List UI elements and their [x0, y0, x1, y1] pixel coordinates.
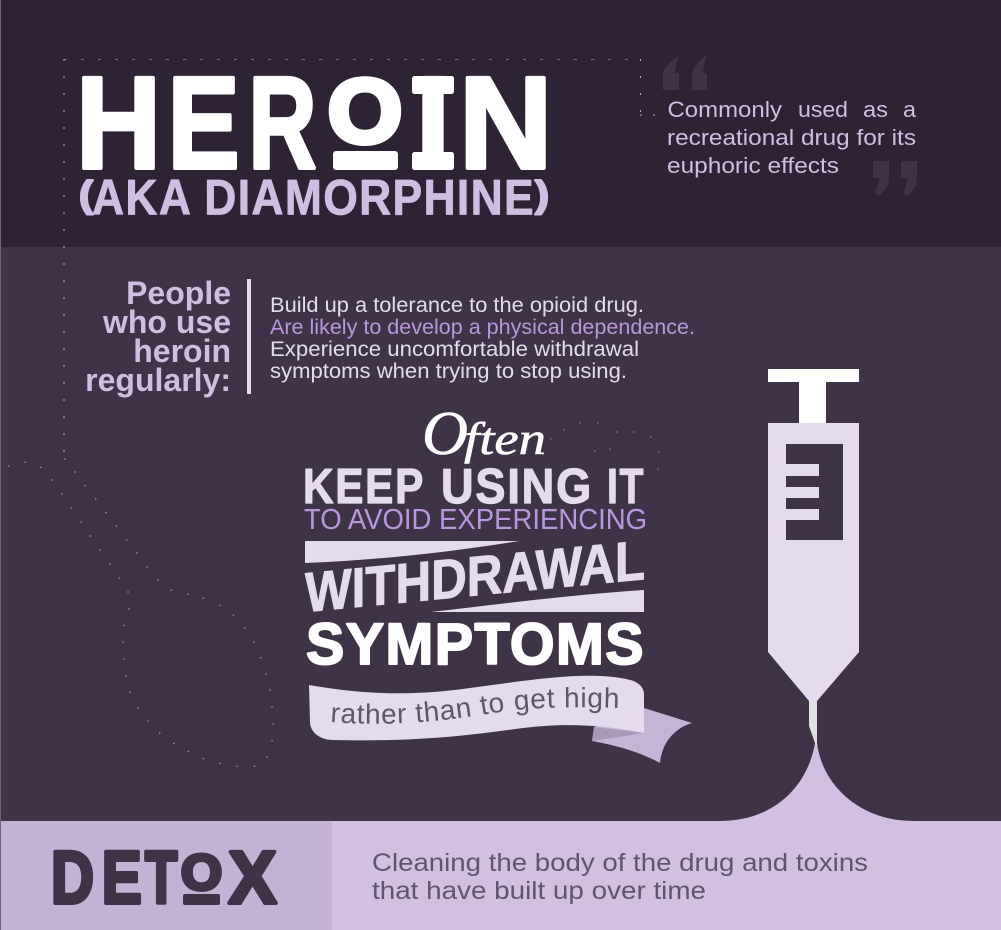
lettering: Often: ften — [464, 413, 546, 464]
barrel window with measure ticks — [786, 444, 843, 540]
lettering: keep using it: IT — [607, 460, 645, 514]
lettering: Often: O — [422, 400, 468, 468]
title: DETOX: D — [51, 836, 94, 919]
lettering: symptoms: SYMPTOMS — [306, 612, 645, 677]
title: DETOX: E — [102, 836, 142, 919]
heading: people who use heroin regularly: People — [126, 275, 231, 311]
text block: effects of regular use — [270, 294, 695, 383]
lettering: keep using it — [303, 460, 645, 514]
title: HEROIN: E — [168, 49, 240, 196]
ribbon banner: rather than to get high — [332, 687, 618, 724]
quote text: used — [798, 97, 848, 122]
barrel — [768, 423, 859, 701]
subtitle: ( — [79, 174, 94, 215]
quote text: Commonly — [668, 97, 782, 122]
heading: people who use heroin regularly: who use — [102, 304, 231, 340]
plunger — [768, 369, 859, 423]
subtitle: ) — [535, 174, 549, 215]
syringe base flare — [720, 743, 913, 821]
text block: detox definition: that have built up over time — [372, 877, 706, 905]
heading: people who use heroin regularly: regularly: — [85, 362, 231, 398]
title: DETOX: X — [228, 836, 276, 919]
quote text: euphoric effects — [667, 153, 839, 178]
title: HEROIN — [76, 49, 552, 196]
panel: detox band — [0, 821, 1001, 930]
quote text: a — [903, 97, 917, 122]
panel: middle background — [0, 247, 1001, 821]
lettering: withdrawal with wedges: WITHDRAWAL — [305, 528, 645, 624]
title: HEROIN: O — [328, 62, 402, 162]
lettering: to avoid experiencing: TO AVOID EXPERIENCING — [304, 504, 647, 536]
title: DETOX — [51, 836, 276, 919]
title: HEROIN: N — [459, 49, 552, 196]
icon: opening quote mark — [663, 55, 707, 90]
text block: detox definition: Cleaning the body of the drug and toxins — [372, 849, 868, 877]
ribbon tail — [592, 708, 692, 763]
text block: effects of regular use: Are likely to develop a physical dependence. — [270, 316, 695, 339]
quote block — [663, 55, 917, 196]
title: HEROIN: H — [76, 49, 161, 196]
text block: effects of regular use: symptoms when trying to stop using. — [270, 360, 627, 383]
text block: detox definition — [372, 849, 868, 905]
title: HEROIN: R — [248, 49, 316, 196]
title: DETOX: T — [145, 836, 177, 919]
quote text: as — [863, 97, 888, 122]
panel: header background — [0, 0, 1001, 247]
needle — [809, 701, 817, 747]
title: HEROIN: I — [416, 49, 450, 196]
lettering: keep using it: USING — [441, 460, 593, 514]
quote text: recreational drug for its — [667, 125, 916, 150]
dotted guide lines — [8, 59, 660, 766]
ribbon front — [309, 676, 644, 740]
heading: people who use heroin regularly — [85, 275, 231, 398]
text block: effects of regular use: Experience uncomfortable withdrawal — [270, 338, 639, 361]
text block: effects of regular use: Build up a tolerance to the opioid drug. — [270, 294, 644, 317]
heading: people who use heroin regularly: heroin — [133, 333, 231, 369]
ribbon banner — [309, 676, 692, 763]
divider bar — [247, 279, 251, 394]
subtitle: AKA DIAMORPHINE — [92, 170, 535, 226]
title: DETOX: O — [181, 844, 222, 900]
icon: closing quote mark — [873, 161, 917, 196]
quote text — [667, 97, 917, 178]
lettering: keep using it: KEEP — [303, 460, 425, 514]
icon: syringe — [720, 369, 913, 821]
